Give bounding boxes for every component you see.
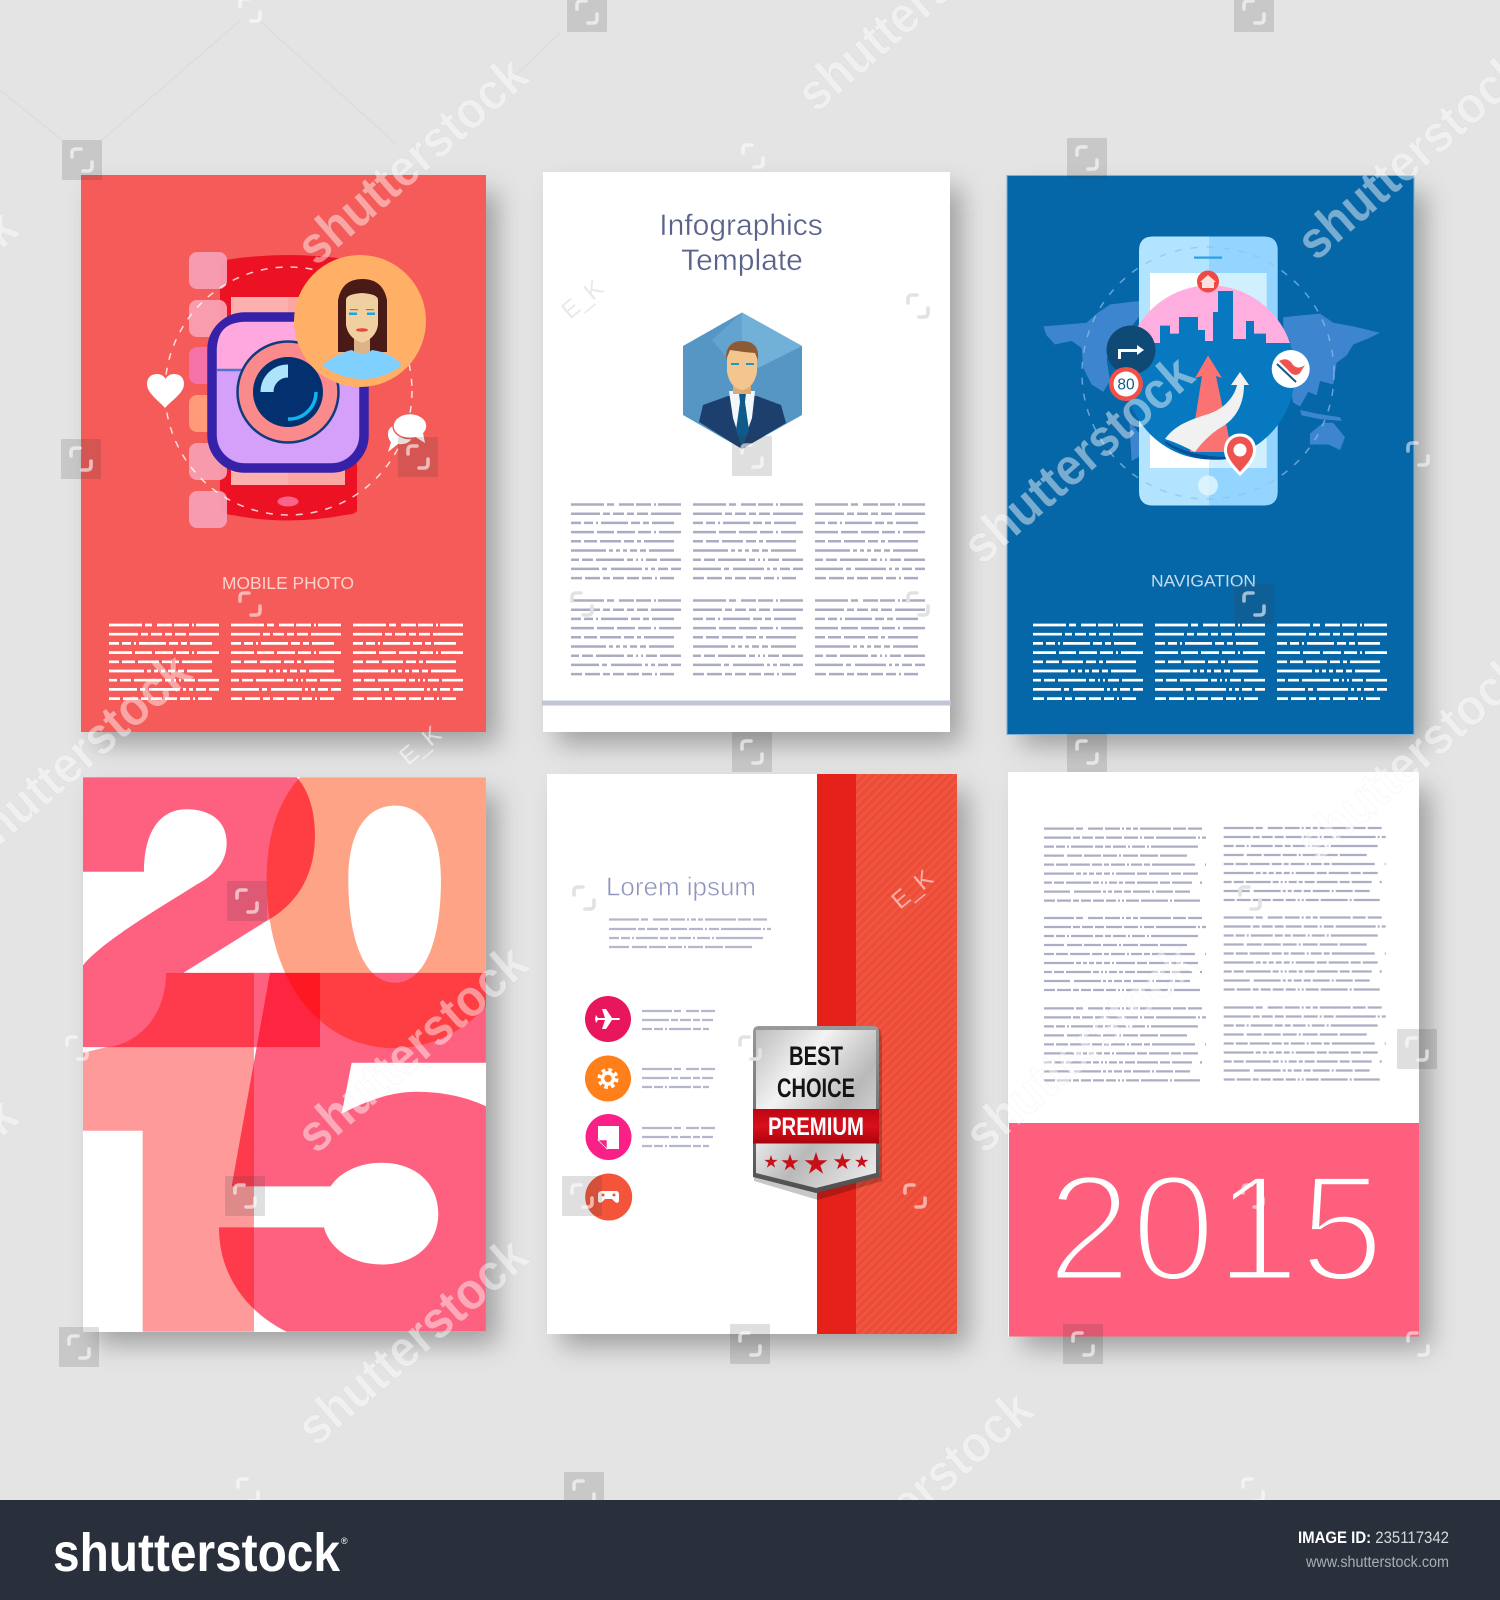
salmon stripe [856, 774, 957, 1334]
footer bar [0, 1500, 1500, 1600]
watermark: E_K marks: E_K [557, 275, 609, 325]
panel: big 2015 cover [83, 777, 486, 1332]
panel: mobile photo [81, 175, 486, 732]
icon: blue smartphone [1139, 236, 1278, 506]
dashed orbit [1082, 247, 1334, 499]
icon: location pin [1224, 434, 1256, 476]
icon: speed limit 80: 80 [1117, 376, 1135, 394]
icon: gamepad [585, 1174, 632, 1220]
watermark: shutterstock diagonals: shutterstock [286, 1226, 539, 1457]
text block: upper columns [571, 504, 925, 578]
digit 2 [83, 777, 320, 1047]
city globe [1125, 285, 1295, 459]
photo thumbnails strip [189, 252, 227, 528]
title: Template [681, 244, 803, 277]
white road arrow [1165, 372, 1249, 452]
icon: flag [1272, 350, 1310, 388]
list text 2 [642, 1069, 715, 1087]
digit 5 [219, 973, 486, 1332]
icon: businessman hexagon [683, 312, 802, 449]
panel: navigation [1007, 176, 1414, 734]
title [659, 209, 823, 277]
watermark: shutterstock diagonals: shutterstock [286, 933, 539, 1164]
icon: turn sign [1106, 326, 1156, 374]
heading: navigation: NAVIGATION [1151, 572, 1256, 590]
icon: plane [585, 996, 631, 1042]
dashed orbit [165, 267, 412, 515]
registered mark: ® [341, 1536, 348, 1546]
pink footer block [1009, 1123, 1419, 1336]
icon: red smartphone [220, 255, 357, 520]
text block: mobile photo columns [109, 625, 463, 699]
icon: home [1197, 270, 1219, 292]
watermark: E_K marks [395, 275, 939, 915]
image id: IMAGE ID: 235117342 [1298, 1529, 1449, 1547]
icon: gear [585, 1056, 631, 1102]
icon: camera [212, 317, 364, 468]
icon: avatar woman [294, 255, 426, 387]
list text 3 [642, 1128, 715, 1146]
best choice badge: CHOICE [777, 1073, 855, 1103]
text block: right column [1224, 828, 1386, 1080]
digit 0 [267, 777, 486, 1048]
watermark: E_K marks: E_K [395, 721, 447, 771]
watermark: E_K marks: E_K [887, 865, 939, 915]
text block: intro [609, 920, 771, 947]
panel: best choice [547, 774, 957, 1334]
title: Infographics [659, 209, 823, 242]
footer logo: shutterstock [53, 1523, 341, 1583]
text block: lower columns [571, 600, 925, 674]
text block: left column [1044, 829, 1206, 1080]
best choice badge: BEST [789, 1041, 843, 1071]
world map [1043, 301, 1380, 461]
list text 1 [642, 1011, 715, 1029]
red ribbon [817, 774, 856, 1334]
text block: navigation columns [1033, 625, 1387, 699]
best choice badge: PREMIUM [768, 1113, 864, 1141]
panel shadows [95, 188, 1430, 1348]
year 2015: 2015 [1047, 1144, 1384, 1314]
panel: report 2015 [1008, 772, 1419, 1336]
icon: folded note [586, 1114, 632, 1160]
icon: speech bubbles [388, 414, 427, 452]
best choice badge [753, 1026, 882, 1200]
heading: lorem ipsum: Lorem ipsum [606, 872, 756, 902]
website: www.shutterstock.com [1305, 1554, 1449, 1571]
digit 1 [83, 973, 254, 1332]
footer rule [542, 700, 951, 706]
watermark: shutterstock diagonals: shutterstock [952, 344, 1205, 575]
icon: speed limit 80 [1109, 367, 1143, 401]
heading: mobile photo: MOBILE PHOTO [222, 573, 354, 593]
icon: heart [147, 374, 184, 408]
watermark: shutterstock diagonals: shutterstock [286, 45, 539, 276]
badge ribbon [753, 1109, 879, 1144]
watermark: shutterstock diagonals: shutterstock [954, 933, 1207, 1164]
red direction arrow [1190, 356, 1232, 452]
panel: infographics template [542, 172, 951, 732]
badge stars [764, 1152, 868, 1174]
